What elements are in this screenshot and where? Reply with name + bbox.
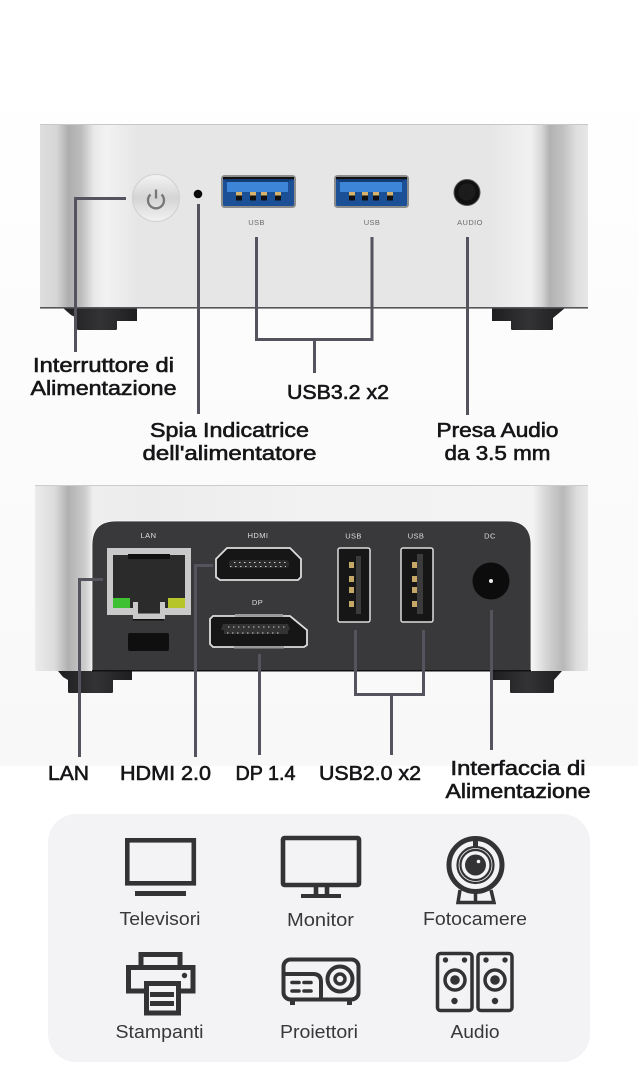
label: power LED — [142, 420, 316, 465]
label: USB 2.0: USB2.0 x2 — [319, 763, 421, 785]
DC power jack — [472, 562, 510, 600]
port captions rear — [141, 531, 496, 607]
label: power LED: Spia Indicatrice — [150, 420, 309, 442]
label: audio jack — [436, 420, 558, 465]
label: power interface — [446, 758, 590, 803]
label: audio jack: Presa Audio — [436, 420, 558, 442]
device: rear view — [35, 485, 588, 693]
icon: projector — [284, 960, 358, 1005]
icon: speakers — [438, 954, 512, 1010]
label: power switch — [30, 355, 176, 400]
text: Fotocamere: Fotocamere — [423, 908, 527, 929]
text: Televisori: Televisori — [120, 908, 200, 929]
port captions rear: DP — [252, 598, 263, 607]
USB 3.2 port left — [222, 176, 295, 207]
device: front view — [40, 124, 588, 330]
text: Stampanti: Stampanti — [116, 1021, 204, 1042]
port captions rear: USB — [345, 532, 362, 540]
label: LAN: LAN — [48, 763, 89, 785]
right foot — [493, 671, 562, 693]
port captions front: USB — [248, 218, 265, 227]
USB 2.0 port left — [338, 548, 370, 622]
photo background — [0, 0, 638, 766]
audio jack — [454, 180, 480, 206]
label: power LED: dell'alimentatore — [142, 443, 316, 465]
port captions rear: USB — [408, 532, 424, 540]
left foot — [63, 308, 137, 330]
label: power switch: Alimentazione — [30, 378, 176, 400]
text: Monitor: Monitor — [287, 909, 354, 930]
left foot — [58, 671, 132, 693]
power button — [132, 174, 180, 222]
USB 2.0 port right — [401, 548, 433, 622]
HDMI port — [216, 548, 301, 580]
label: power interface: Alimentazione — [446, 781, 590, 803]
callout lines: front — [76, 198, 468, 415]
port captions front — [248, 218, 483, 227]
icon: printer — [128, 954, 193, 1013]
panel: compatible devices — [48, 814, 590, 1062]
text: Proiettori: Proiettori — [280, 1021, 358, 1042]
port captions rear: HDMI — [248, 531, 268, 540]
icon: webcam — [449, 838, 502, 903]
label: DP 1.4: DP 1.4 — [236, 763, 296, 785]
USB 3.2 port right — [335, 176, 408, 207]
label: audio jack: da 3.5 mm — [444, 443, 550, 465]
power LED — [194, 190, 202, 198]
latch slot — [128, 633, 169, 651]
LAN port — [107, 548, 191, 620]
label: power interface: Interfaccia di — [450, 758, 586, 780]
callout lines: rear — [80, 566, 492, 757]
label: HDMI 2.0: HDMI 2.0 — [120, 763, 211, 785]
label: USB 3.2: USB3.2 x2 — [287, 382, 389, 404]
label: power switch: Interruttore di — [33, 355, 174, 377]
port captions rear: LAN — [141, 531, 156, 540]
DisplayPort port — [210, 614, 307, 648]
text: Audio: Audio — [450, 1021, 500, 1042]
port captions front: USB — [364, 218, 380, 227]
port captions front: AUDIO — [457, 218, 483, 227]
icon: monitor — [283, 838, 359, 898]
port captions rear: DC — [484, 532, 496, 540]
right foot — [492, 308, 565, 330]
rear port panel — [92, 521, 531, 671]
icon: television — [127, 840, 194, 896]
